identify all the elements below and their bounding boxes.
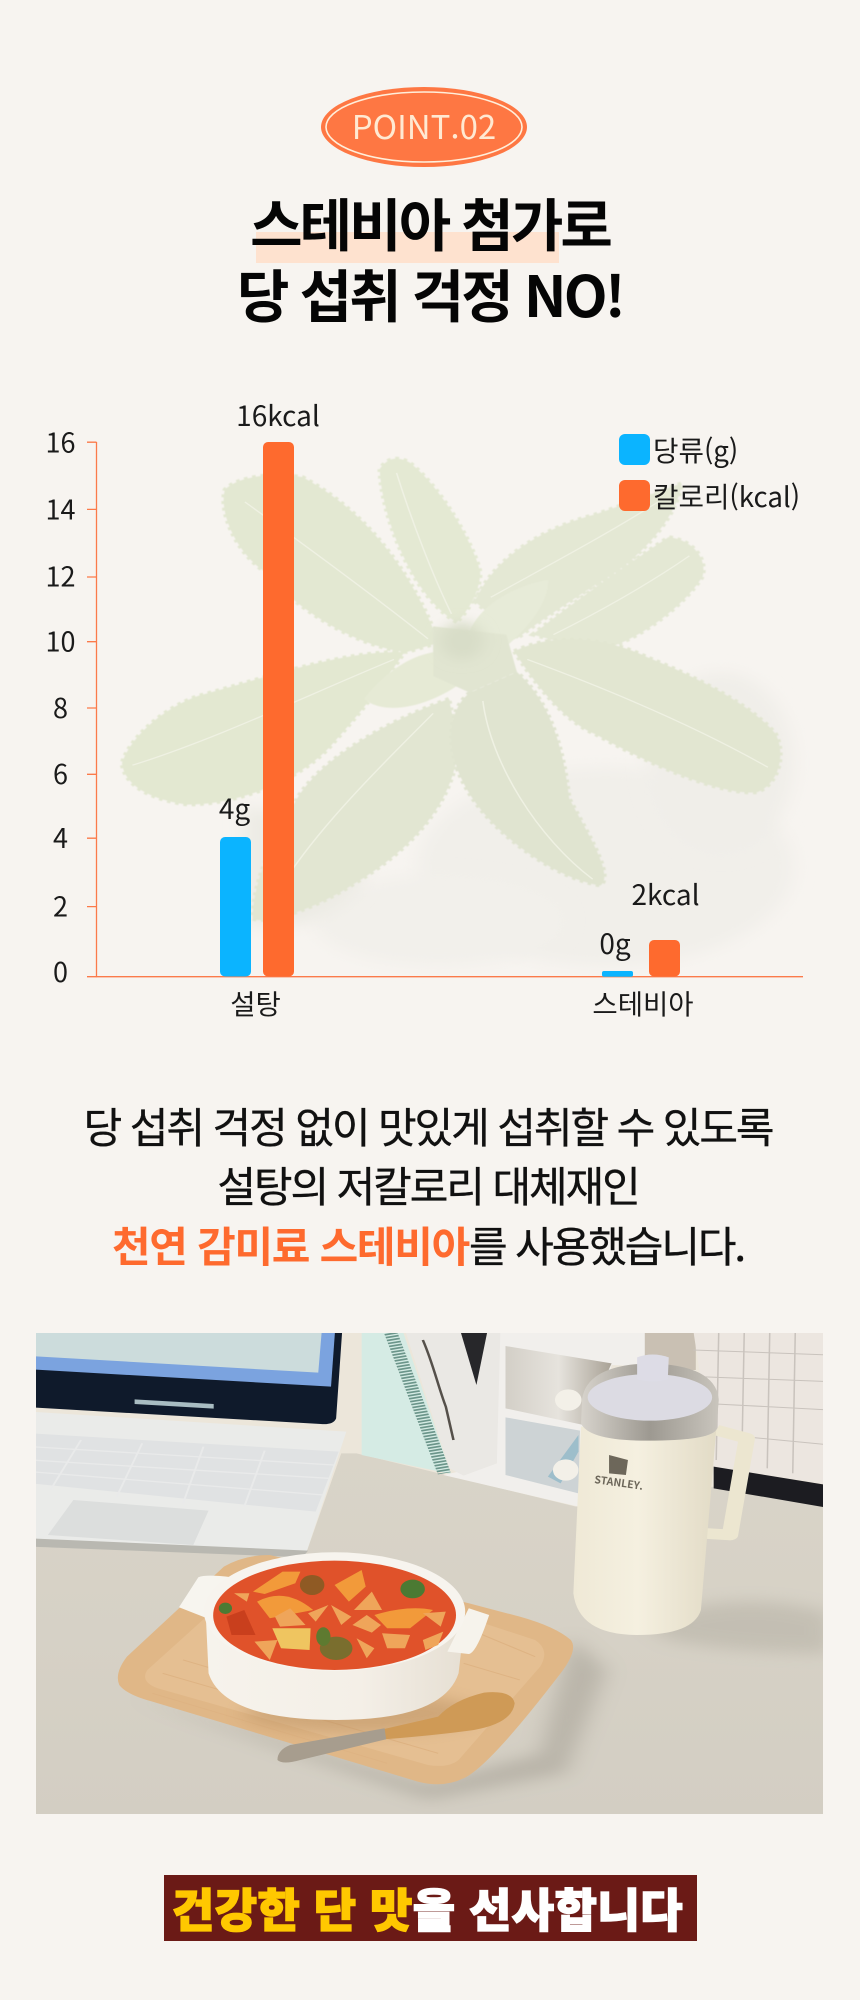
value labels: 16kcal bbox=[236, 395, 320, 435]
legend bbox=[619, 429, 800, 515]
category labels bbox=[230, 982, 694, 1022]
wall bbox=[30, 1330, 831, 1555]
body line 1: 당 섭취 걱정 없이 맛있게 섭취할 수 있도록 bbox=[84, 1095, 772, 1156]
bowl bbox=[206, 1620, 465, 1720]
y axis labels: 4 bbox=[53, 817, 68, 856]
banner text: 건강한 단 맛을 선사합니다 bbox=[172, 1875, 683, 1941]
tumbler body bbox=[573, 1427, 716, 1635]
y axis labels: 12 bbox=[46, 556, 75, 594]
drawer unit bbox=[443, 1330, 647, 1507]
keyboard bbox=[30, 1412, 346, 1555]
tablet bbox=[30, 1330, 342, 1424]
category labels: 설탕 bbox=[230, 982, 281, 1022]
spoon bbox=[383, 1692, 515, 1739]
soup bbox=[213, 1561, 456, 1670]
y axis labels: 8 bbox=[53, 687, 68, 726]
y axis labels bbox=[46, 422, 75, 990]
title line 1: 스테비아 첨가로 bbox=[250, 181, 610, 263]
y axis bbox=[87, 442, 803, 977]
background image: stevia leaf bbox=[122, 459, 794, 966]
value labels: 4g bbox=[219, 788, 250, 828]
value labels: 0g bbox=[599, 923, 631, 963]
category labels: 스테비아 bbox=[592, 982, 694, 1022]
y axis labels: 2 bbox=[53, 886, 68, 924]
tray bbox=[118, 1555, 573, 1784]
bowl shadow bbox=[244, 1693, 479, 1733]
badge: POINT.02 bbox=[321, 87, 527, 167]
legend: 당류(g) bbox=[653, 429, 738, 469]
mint stand bbox=[362, 1330, 451, 1474]
banner: healthy sweet taste bbox=[164, 1875, 697, 1941]
tumbler handle bbox=[703, 1430, 747, 1535]
notebook bbox=[390, 1330, 444, 1473]
bars: stevia bbox=[602, 940, 680, 977]
shadows bbox=[251, 1643, 609, 1802]
photo: stew bowl on wooden tray with tumbler bbox=[36, 1333, 823, 1814]
title line 2: 당 섭취 걱정 NO! bbox=[237, 252, 623, 334]
y axis labels: 6 bbox=[53, 753, 68, 792]
chart: sugar and calorie bars over stevia leaf bbox=[46, 395, 803, 1022]
calendar bbox=[694, 1333, 696, 1348]
tumbler brand text: STANLEY. bbox=[593, 1472, 644, 1494]
tumbler logo bbox=[609, 1455, 628, 1475]
cloth bbox=[36, 1453, 823, 1814]
y axis labels: 14 bbox=[46, 488, 75, 528]
badge: POINT.02: POINT.02 bbox=[352, 101, 496, 149]
title highlight bbox=[256, 232, 559, 263]
title block bbox=[237, 181, 623, 334]
y axis labels: 10 bbox=[46, 620, 75, 660]
y axis labels: 0 bbox=[53, 951, 68, 990]
value labels: 2kcal bbox=[631, 874, 700, 914]
value labels bbox=[219, 395, 700, 963]
legend: 칼로리(kcal) bbox=[653, 475, 800, 515]
body text bbox=[84, 1095, 773, 1275]
bars: sugar bbox=[220, 442, 294, 976]
body line 2: 설탕의 저칼로리 대체재인 bbox=[217, 1154, 639, 1215]
y axis labels: 16 bbox=[46, 422, 75, 460]
body line 3: 천연 감미료 스테비아를 사용했습니다. bbox=[112, 1214, 744, 1275]
tumbler rim bbox=[581, 1363, 719, 1441]
